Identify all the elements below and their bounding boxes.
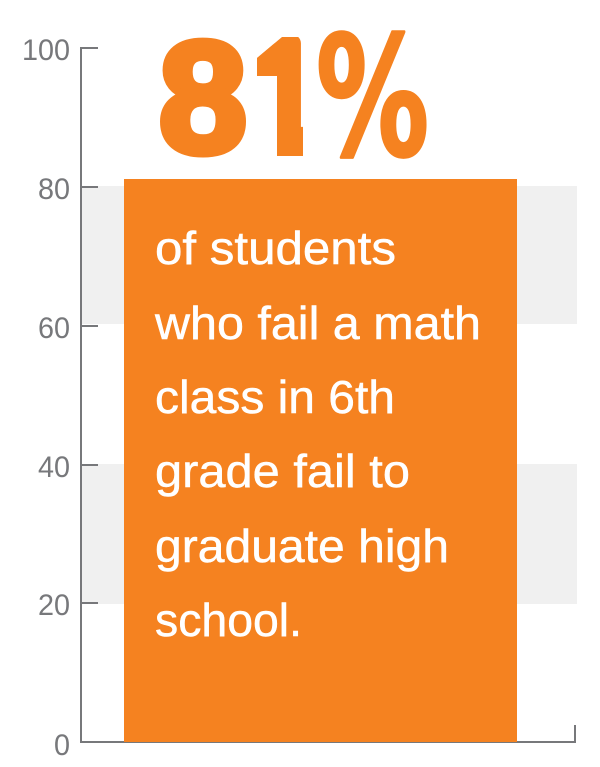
axis labels: 20: [38, 589, 70, 622]
bar description text: of students: [155, 222, 396, 274]
axis labels: 40: [38, 451, 70, 484]
headline 81%: %: [316, 2, 429, 195]
bar description text: class in 6th: [155, 371, 395, 423]
axis labels: 80: [38, 173, 70, 206]
bar description text: grade fail to: [155, 445, 410, 497]
axis labels: 60: [38, 312, 70, 345]
headline 81%: 1: [230, 10, 322, 186]
axis labels: 0: [54, 729, 70, 762]
bar description text: [154, 222, 481, 646]
axis labels: [22, 34, 70, 762]
headline 81%: [160, 30, 427, 159]
chart axes: [81, 48, 575, 742]
bar description text: school.: [155, 594, 302, 646]
axis labels: 100: [22, 34, 70, 67]
orange bar: [124, 179, 517, 742]
bar description text: graduate high: [155, 520, 449, 572]
headline 81%: 8: [159, 10, 247, 186]
bar description text: who fail a math: [154, 297, 481, 349]
chart background bands: [82, 186, 577, 604]
